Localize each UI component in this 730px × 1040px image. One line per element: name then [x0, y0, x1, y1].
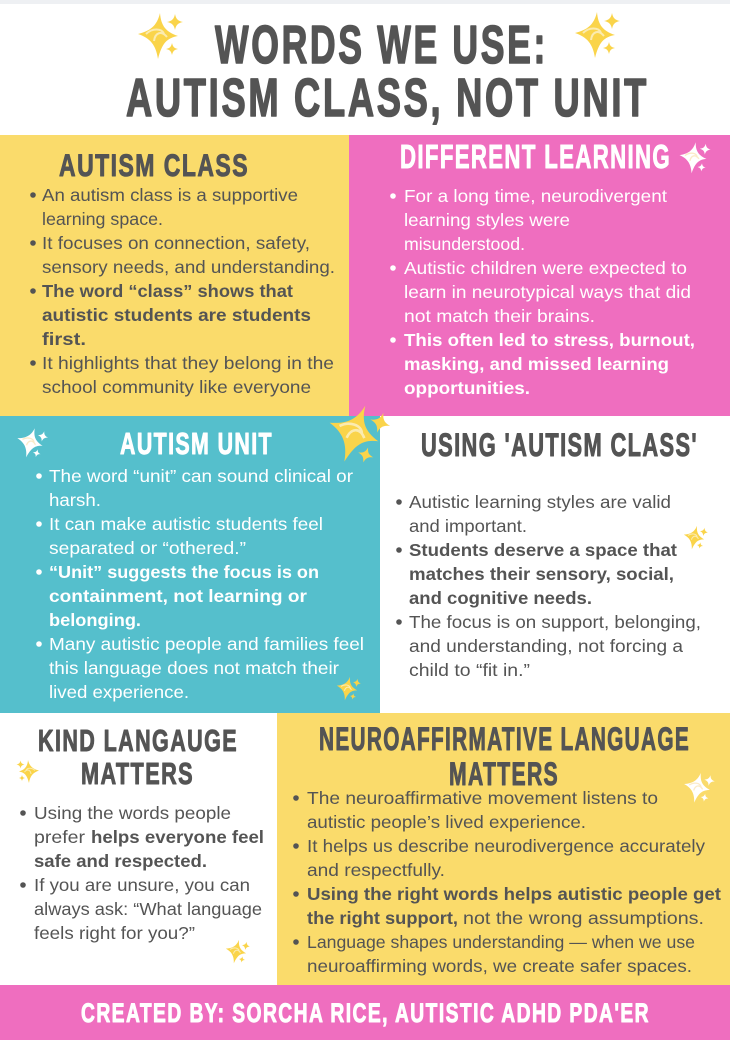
panel: neuroaffirmative language matters — [277, 713, 730, 985]
panel: using autism class — [380, 416, 730, 713]
text block: autism class bullets: learning space. — [42, 209, 163, 229]
text block: neuroaffirmative bullets: autistic people’s lived experience. — [307, 812, 586, 832]
text block: autism class bullets: school community like everyone — [42, 377, 311, 397]
text block: different learning bullets: This often led to stress, burnout, — [404, 330, 695, 350]
text block: using autism class bullets: Autistic learning styles are valid — [409, 492, 671, 512]
text block: different learning bullets: learn in neurotypical ways that did — [404, 282, 691, 302]
text block: different learning bullets: not match their brains. — [404, 306, 595, 326]
icon: sparkle left — [138, 13, 183, 59]
text block: neuroaffirmative bullets: not the wrong assumptions. — [463, 908, 704, 928]
text block: kind language bullets: prefer — [34, 827, 85, 847]
text block: neuroaffirmative bullets: Using the right words helps autistic people get — [307, 884, 721, 904]
heading: kind language matters: MATTERS — [81, 756, 194, 791]
title: WORDS WE USE: — [215, 15, 548, 75]
panel: title — [0, 4, 730, 135]
text block: autism unit bullets: The word “unit” can sound clinical or — [49, 466, 353, 486]
icon: yellow sparkle — [335, 675, 362, 703]
text block: different learning bullets: opportunities. — [404, 378, 530, 398]
heading: neuroaffirmative language matters — [319, 721, 690, 792]
text block: autism unit bullets: harsh. — [49, 490, 101, 510]
text block: using autism class bullets: and important. — [409, 516, 527, 536]
text block: kind language bullets — [20, 803, 264, 943]
text block: using autism class bullets: Students deserve a space that — [409, 540, 677, 560]
text block: different learning bullets: masking, and missed learning — [404, 354, 669, 374]
text block: autism class bullets: first. — [42, 329, 86, 349]
text block: using autism class bullets: The focus is on support, belonging, — [409, 612, 701, 632]
text block: autism unit bullets: Many autistic people and families feel — [49, 634, 364, 654]
text block: neuroaffirmative bullets — [293, 788, 721, 976]
panel: footer — [0, 985, 730, 1040]
text block: different learning bullets: misunderstood. — [404, 234, 525, 254]
text block: kind language bullets: If you are unsure, you can — [34, 875, 250, 895]
text block: autism class bullets — [30, 185, 335, 397]
icon: sparkle right — [575, 12, 620, 58]
heading: kind language matters — [38, 723, 238, 791]
text block: neuroaffirmative bullets: It helps us describe neurodivergence accurately — [307, 836, 705, 856]
text block: autism class bullets: autistic students are students — [42, 305, 311, 325]
text block: using autism class bullets — [396, 492, 701, 680]
text block: autism class bullets: sensory needs, and understanding. — [42, 257, 335, 277]
icon: yellow sparkle — [682, 524, 709, 552]
top strip — [0, 0, 730, 4]
text block: autism unit bullets: lived experience. — [49, 682, 189, 702]
heading: kind language matters: KIND LANGAUGE — [38, 723, 238, 758]
text block: autism unit bullets: belonging. — [49, 610, 141, 630]
text block: using autism class bullets: and understanding, not forcing a — [409, 636, 683, 656]
panel: autism class — [0, 135, 349, 416]
panel: kind language matters — [0, 713, 277, 985]
text block: kind language bullets: helps everyone feel — [91, 827, 264, 847]
text block: different learning bullets: For a long time, neurodivergent — [404, 186, 667, 206]
heading: neuroaffirmative language matters: MATTERS — [449, 756, 559, 792]
text block: neuroaffirmative bullets: neuroaffirming words, we create safer spaces. — [307, 956, 692, 976]
text block: using autism class bullets: and cognitive needs. — [409, 588, 592, 608]
text block: kind language bullets: feels right for you?” — [34, 923, 195, 943]
text block: neuroaffirmative bullets: and respectfully. — [307, 860, 445, 880]
text block: autism unit bullets: containment, not learning or — [49, 586, 307, 606]
text block: neuroaffirmative bullets: Language shapes understanding — when we use — [307, 932, 695, 952]
text block: neuroaffirmative bullets: the right support, — [307, 908, 458, 928]
text block: kind language bullets: safe and respected. — [34, 851, 207, 871]
icon: white sparkle — [681, 770, 716, 805]
icon: yellow sparkle — [16, 760, 39, 783]
text block: different learning bullets — [390, 186, 695, 398]
panel: autism unit — [0, 416, 380, 713]
text block: autism unit bullets: this language does not match their — [49, 658, 339, 678]
panel: different learning — [349, 135, 730, 416]
text block: autism class bullets: It focuses on connection, safety, — [42, 233, 310, 253]
text block: using autism class bullets: matches their sensory, social, — [409, 564, 674, 584]
icon: white sparkle — [13, 425, 50, 461]
text block: kind language bullets: always ask: “What language — [34, 899, 262, 919]
text block: autism unit bullets: separated or “othered.” — [49, 538, 246, 558]
text block: autism class bullets: It highlights that they belong in the — [42, 353, 334, 373]
icon: large yellow sparkle — [320, 397, 394, 472]
text block: different learning bullets: Autistic children were expected to — [404, 258, 687, 278]
heading: autism unit: AUTISM UNIT — [120, 427, 273, 461]
text block: autism unit bullets — [36, 466, 364, 702]
text block: kind language bullets: Using the words people — [34, 803, 231, 823]
icon: white sparkle — [678, 141, 711, 175]
heading: autism class: AUTISM CLASS — [59, 147, 249, 183]
text block: different learning bullets: learning styles were — [404, 210, 570, 230]
icon: yellow sparkle — [224, 938, 251, 966]
text block: using autism class bullets: child to “fit in.” — [409, 660, 530, 680]
text block: autism class bullets: The word “class” shows that — [42, 281, 293, 301]
text block: autism unit bullets: “Unit” suggests the focus is on — [49, 562, 319, 582]
text block: autism unit bullets: It can make autistic students feel — [49, 514, 323, 534]
title — [126, 15, 649, 128]
text block: autism class bullets: An autism class is a supportive — [42, 185, 298, 205]
text block: neuroaffirmative bullets: The neuroaffirmative movement listens to — [307, 788, 658, 808]
